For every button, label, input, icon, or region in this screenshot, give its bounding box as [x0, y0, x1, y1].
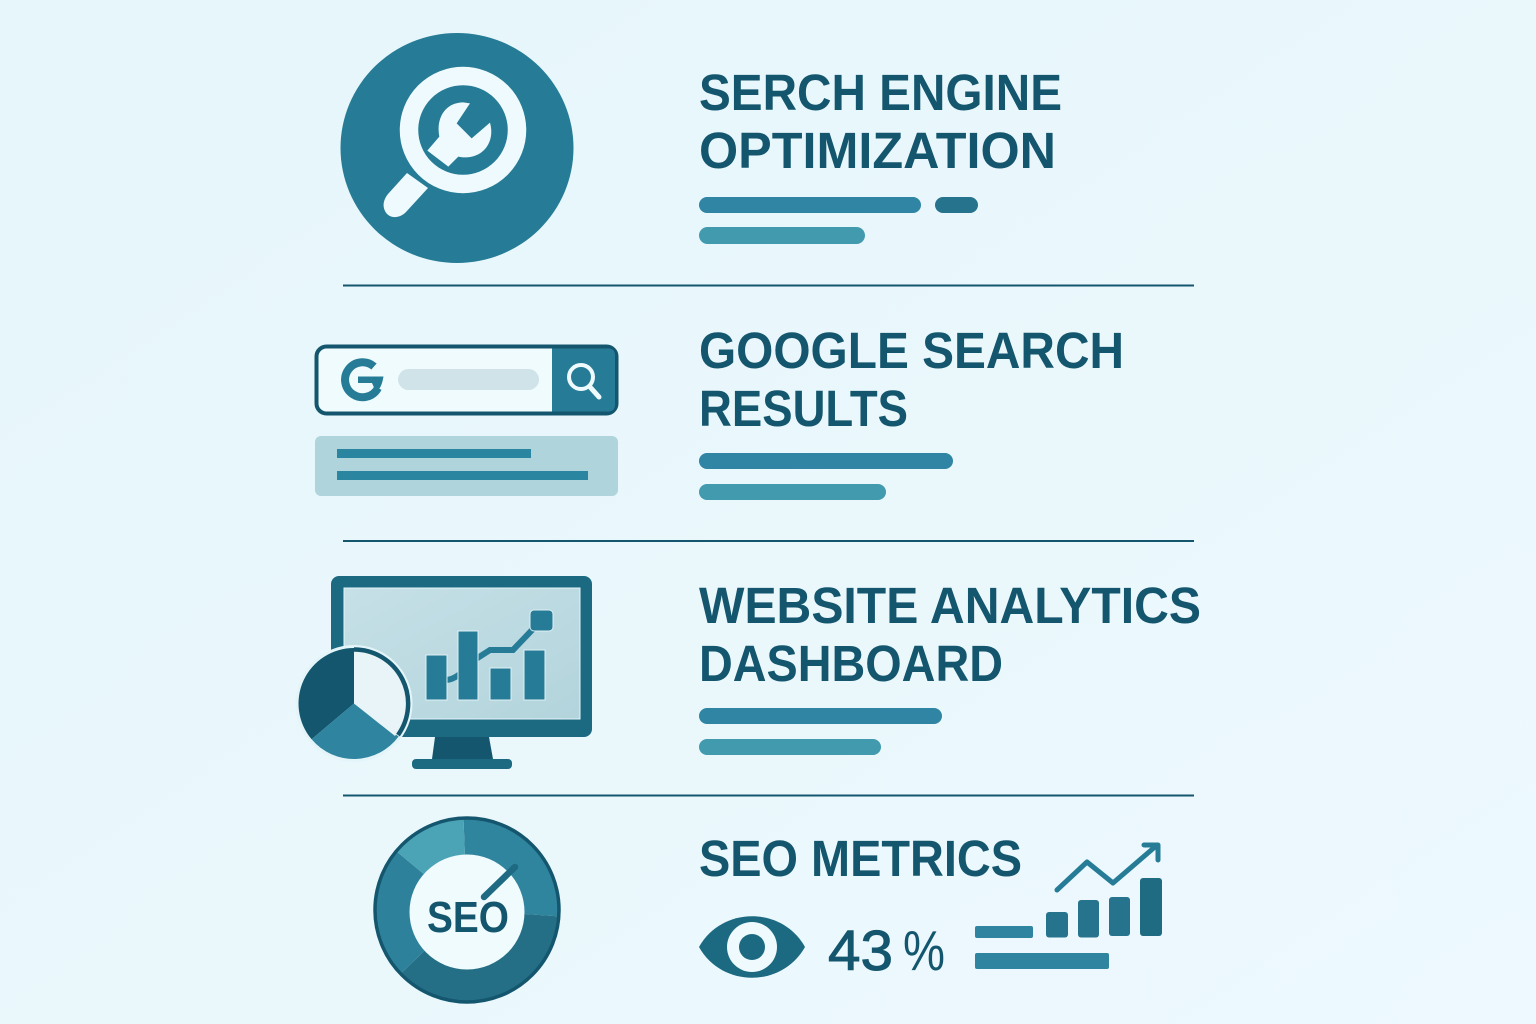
heading: seo metrics: SEO METRICS [699, 830, 1022, 887]
pie chart [296, 645, 412, 762]
icon: eye [699, 916, 805, 978]
placeholder text bars [699, 453, 953, 500]
heading: search engine optimization: SERCH ENGINE [699, 64, 1062, 121]
heading: website analytics dashboard: WEBSITE ANALYTICS [699, 577, 1201, 634]
heading: google search results: GOOGLE SEARCH [699, 322, 1124, 379]
panel: seo metrics [375, 818, 1162, 1002]
heading: google search results: RESULTS [699, 380, 908, 437]
bar chart with trend arrow [1046, 845, 1162, 938]
metric value: % [903, 919, 945, 983]
panel: search engine optimization [340, 33, 1062, 263]
icon: search result card [315, 436, 618, 496]
bar chart [426, 610, 553, 700]
icon: search bar [316, 346, 616, 414]
icon: monitor with charts [296, 576, 592, 769]
metric value: 43 [828, 919, 893, 983]
gauge label: SEO [427, 893, 509, 942]
heading: search engine optimization: OPTIMIZATION [699, 122, 1056, 179]
heading: website analytics dashboard: DASHBOARD [699, 635, 1003, 692]
icon: magnifier with wrench [340, 33, 574, 263]
placeholder bars [975, 926, 1109, 969]
placeholder text bars [699, 197, 978, 244]
panel: website analytics dashboard [296, 576, 1201, 769]
panel: google search results [315, 322, 1124, 500]
placeholder text bars [699, 708, 942, 755]
icon: seo gauge [375, 818, 559, 1002]
